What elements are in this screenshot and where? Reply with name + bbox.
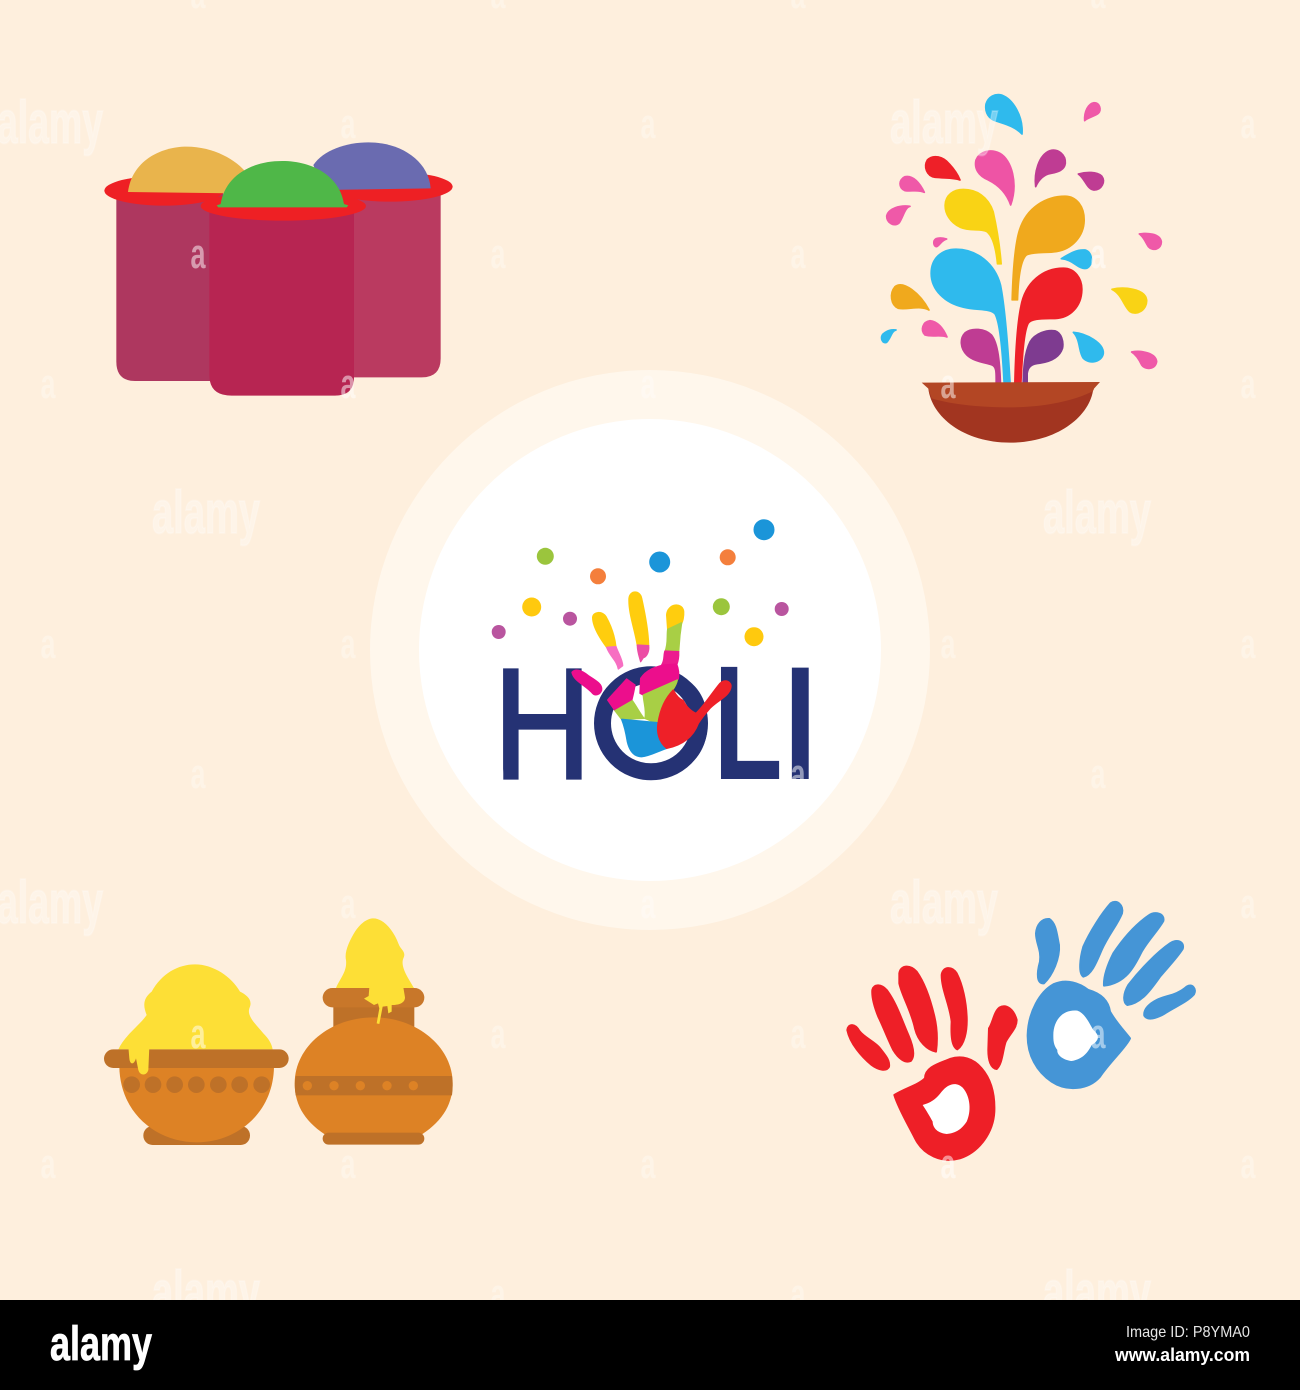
watermark letters over icons: a <box>790 750 806 797</box>
splash: small drops <box>882 95 1161 368</box>
watermarks: alamy <box>890 869 998 936</box>
image id: Image ID: P8YMA0 <box>1126 1324 1250 1341</box>
watermark letters over icons: a <box>340 360 356 407</box>
small watermark letters: a <box>340 620 356 667</box>
watermark letters over icons: a <box>190 230 206 277</box>
icon: colour splash bowl <box>882 95 1161 443</box>
small watermark letters: a <box>490 1010 506 1057</box>
watermarks: alamy <box>1043 1259 1151 1326</box>
small watermark letters: a <box>940 620 956 667</box>
icon: pots with yellow colour <box>104 918 453 1145</box>
watermarks: alamy <box>890 89 998 156</box>
watermark letters over icons: a <box>1090 230 1106 277</box>
watermarks: alamy <box>152 1259 260 1326</box>
small watermark letters: a <box>40 620 56 667</box>
watermark letters over icons <box>190 230 1106 1187</box>
small watermark letters: a <box>40 360 56 407</box>
word HOLI <box>493 632 822 814</box>
icon: hand prints <box>847 902 1195 1160</box>
center circle badge <box>370 370 930 930</box>
watermark letters over icons: a <box>940 360 956 407</box>
small watermark letters: a <box>490 1270 506 1317</box>
small watermark letters: a <box>790 1010 806 1057</box>
small watermark letters: a <box>490 490 506 537</box>
watermarks: alamy <box>1043 479 1151 546</box>
word HOLI: O <box>587 640 716 807</box>
footer bar <box>0 1300 1300 1390</box>
bowl pot <box>104 964 289 1145</box>
small watermark letters: a <box>1240 1140 1256 1187</box>
small watermark letters: a <box>490 750 506 797</box>
small watermark letters: a <box>1240 360 1256 407</box>
small watermark letters: a <box>790 490 806 537</box>
small watermark letters: a <box>340 880 356 927</box>
watermarks: alamy <box>152 479 260 546</box>
icon: powder buckets <box>104 142 453 396</box>
small watermark letters: a <box>1240 100 1256 147</box>
logo: HOLI with hand <box>492 519 822 814</box>
round pot <box>295 918 453 1145</box>
website: www.alamy.com <box>1114 1344 1250 1365</box>
watermarks: alamy <box>0 869 103 936</box>
small watermark letters: a <box>790 1270 806 1317</box>
small watermark letters: a <box>40 1140 56 1187</box>
small watermark letters: a <box>190 750 206 797</box>
watermark letters over icons: a <box>940 1140 956 1187</box>
small watermark letters: a <box>340 100 356 147</box>
small watermark letters: a <box>640 360 656 407</box>
small watermark letters: a <box>640 1140 656 1187</box>
small watermark letters: a <box>340 1140 356 1187</box>
small watermark letters: a <box>1240 880 1256 927</box>
hand print <box>572 592 731 757</box>
word HOLI: H <box>493 637 591 812</box>
word HOLI: L <box>713 632 783 814</box>
small watermark letters: a <box>1090 750 1106 797</box>
watermarks: alamy <box>0 89 103 156</box>
small watermark letters: a <box>640 100 656 147</box>
small watermark letters: a <box>1240 620 1256 667</box>
word HOLI: I <box>778 634 822 812</box>
splash: large drops <box>931 189 1084 384</box>
footer logo: alamy <box>50 1318 152 1371</box>
small watermark letters: a <box>790 230 806 277</box>
confetti dots <box>492 519 789 646</box>
watermarks <box>0 89 1151 1326</box>
small watermark letters: a <box>490 230 506 277</box>
bowl <box>922 382 1100 443</box>
blue hand <box>1028 902 1195 1088</box>
watermark letters over icons: a <box>1090 1010 1106 1057</box>
red hand <box>847 967 1017 1160</box>
small watermark letters: a <box>640 880 656 927</box>
watermark letters over icons: a <box>190 1010 206 1057</box>
